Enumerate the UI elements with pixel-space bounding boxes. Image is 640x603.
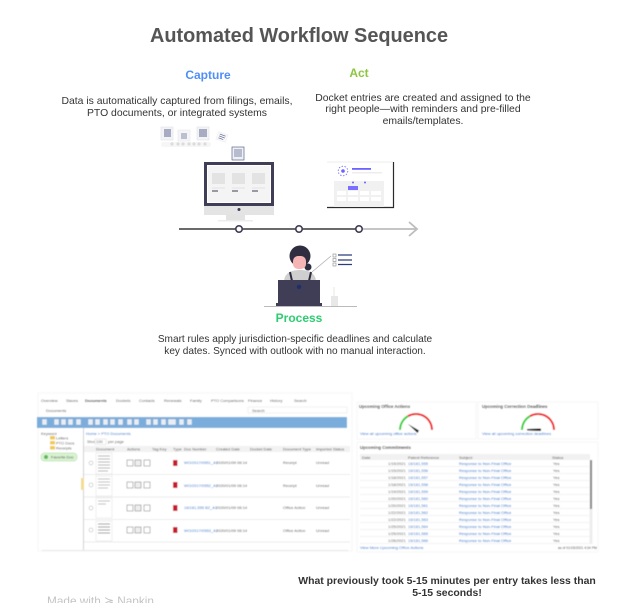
- navigation tabs: PTO Comparisons: [211, 398, 244, 403]
- document table: Home > PTO Documents: [86, 431, 131, 436]
- row 3: Office Action: [283, 505, 305, 510]
- widget: upcoming commitments table: 1/25/2021: [388, 531, 407, 536]
- widget: upcoming commitments table: 1/25/2021: [388, 524, 407, 529]
- widget: upcoming commitments table: Response to Non-Final Office: [459, 468, 512, 473]
- widget: upcoming commitments table: 16/181,557: [408, 475, 429, 480]
- row 1: Unread: [316, 460, 329, 465]
- widget: upcoming commitments table: as of 01/15/2021 4:34 PM: [558, 546, 597, 550]
- widget: upcoming commitments table: Yes: [553, 524, 560, 529]
- icon: floating documents: [161, 127, 244, 160]
- widget: upcoming commitments table: 1/15/2021: [388, 461, 407, 466]
- text block: capture: PTO documents, or integrated systems: [87, 108, 267, 119]
- row 4: 2020/01/09 08:14: [216, 528, 248, 533]
- sidebar tree: Receipts: [56, 446, 72, 450]
- row 4: [89, 521, 329, 541]
- widget: upcoming commitments table: 1/19/2021: [388, 489, 407, 494]
- widget: upcoming commitments table: Yes: [553, 482, 560, 487]
- widget: upcoming commitments table: Yes: [553, 468, 560, 473]
- row 4: WO/2017/0553_A1: [184, 528, 219, 533]
- document table: Actions: [127, 446, 140, 452]
- widget: upcoming commitments table: 16/181,561: [408, 503, 429, 508]
- row 3: Unread: [316, 505, 329, 510]
- widget: upcoming commitments table: 1/15/2021: [388, 468, 407, 473]
- widget: upcoming commitments table: Patent Reference: [408, 455, 440, 460]
- document table: Type: [173, 446, 182, 452]
- widget: upcoming commitments table: 1/20/2021: [388, 503, 407, 508]
- widget: upcoming commitments table: Response to Non-Final Office: [459, 538, 512, 543]
- widget: upcoming commitments table: 16/181,559: [408, 489, 429, 494]
- widget: upcoming commitments table: Yes: [553, 461, 560, 466]
- navigation tabs: History: [270, 398, 282, 403]
- widget: upcoming correction deadlines gauge: View all upcoming correction deadlines: [482, 431, 551, 436]
- sidebar tree: Letters: [56, 436, 68, 440]
- widget: upcoming commitments table: Yes: [553, 510, 560, 515]
- icon: calendar card: [327, 162, 394, 208]
- widget: upcoming office actions gauge: Upcoming Office Actions: [359, 404, 411, 409]
- row 4: Office Action: [283, 528, 305, 533]
- widget: upcoming commitments table: Yes: [553, 475, 560, 480]
- widget: upcoming commitments table: Response to Non-Final Office: [459, 524, 512, 529]
- widget: upcoming commitments table: 1/26/2021: [388, 538, 407, 543]
- widget: upcoming commitments table: 1/20/2021: [388, 496, 407, 501]
- sidebar tree: Keyword: [41, 431, 57, 436]
- row 1: 2020/01/09 08:14: [216, 460, 248, 465]
- widget: upcoming commitments table: 1/22/2021: [388, 517, 407, 522]
- text block: act: Docket entries are created and assigned to the: [315, 93, 531, 104]
- widget: upcoming commitments table: Status: [552, 455, 563, 460]
- widget: upcoming commitments table: 16/181,566: [408, 538, 429, 543]
- title: Automated Workflow Sequence: [150, 25, 448, 47]
- document table: Tag Key: [152, 446, 166, 452]
- text block: capture: [62, 96, 292, 119]
- text block: process: Smart rules apply jurisdiction-specific deadlines and calculate: [158, 334, 433, 345]
- text block: act: [315, 93, 531, 127]
- widget: upcoming correction deadlines gauge: Upcoming Correction Deadlines: [482, 404, 548, 409]
- row 2: WO/2017/0552_A1: [184, 483, 219, 488]
- widget: upcoming commitments table: 1/22/2021: [388, 510, 407, 515]
- widget: upcoming office actions gauge: [357, 402, 476, 439]
- row 2: Unread: [316, 483, 329, 488]
- row 1: [89, 453, 329, 474]
- panel: documents screenshot: [37, 393, 352, 551]
- callout: time savings: What previously took 5-15 minutes per entry takes less than: [298, 576, 596, 587]
- row 2: Receipt: [283, 483, 297, 488]
- widget: upcoming commitments table: [357, 442, 598, 552]
- row 3: [89, 498, 329, 518]
- navigation tabs: Overview: [41, 398, 58, 403]
- widget: upcoming commitments table: 16/181,555: [408, 461, 429, 466]
- illustration: person at laptop: [264, 246, 357, 306]
- navigation tabs: [41, 398, 307, 403]
- widget: upcoming commitments table: Response to Non-Final Office: [459, 475, 512, 480]
- widget: upcoming commitments table: Response to Non-Final Office: [459, 482, 512, 487]
- document table: Document: [96, 446, 115, 452]
- heading: capture: Capture: [185, 68, 231, 82]
- navigation tabs: Slaves: [66, 398, 78, 403]
- widget: upcoming commitments table: Yes: [553, 489, 560, 494]
- heading: act: Act: [349, 66, 369, 80]
- widget: upcoming commitments table: Yes: [553, 517, 560, 522]
- toolbar: [37, 417, 347, 428]
- widget: upcoming commitments table: Subject: [459, 455, 473, 460]
- widget: upcoming commitments table: Response to Non-Final Office: [459, 496, 512, 501]
- widget: upcoming correction deadlines gauge: [478, 402, 598, 439]
- row 1: Receipt: [283, 460, 297, 465]
- widget: upcoming commitments table: 16/181,565: [408, 531, 429, 536]
- widget: upcoming commitments table: 16/181,560: [408, 496, 429, 501]
- navigation tabs: Family: [190, 398, 202, 403]
- widget: upcoming commitments table: Response to Non-Final Office: [459, 510, 512, 515]
- text block: process: [158, 334, 433, 357]
- navigation tabs: Search: [294, 398, 307, 403]
- text block: act: right people—with reminders and pre-filled: [325, 104, 521, 115]
- widget: upcoming commitments table: 16/181,564: [408, 524, 429, 529]
- callout: time savings: [298, 576, 596, 599]
- navigation tabs: Finance: [248, 398, 263, 403]
- widget: upcoming commitments table: 1/18/2021: [388, 482, 407, 487]
- row 1: WO/2017/0551_A1: [184, 460, 219, 465]
- navigation tabs: Documents: [85, 398, 108, 403]
- widget: upcoming commitments table: View More Upcoming Office Actions: [360, 545, 423, 550]
- document table: Show: [87, 439, 97, 444]
- widget: upcoming commitments table: 16/181,563: [408, 517, 429, 522]
- widget: upcoming commitments table: 1/18/2021: [388, 475, 407, 480]
- sidebar tree: Favorite Doc: [51, 454, 74, 460]
- navigation tabs: Dockets: [116, 398, 130, 403]
- document table: 100: [96, 439, 103, 444]
- document table: [81, 431, 350, 542]
- widget: upcoming commitments table: Response to Non-Final Office: [459, 531, 512, 536]
- heading: process: Process: [276, 311, 323, 325]
- widget: upcoming commitments table: Yes: [553, 503, 560, 508]
- widget: upcoming commitments table: Upcoming Commitments: [360, 445, 411, 450]
- panel: documents screenshot: Search: [252, 408, 265, 413]
- row 2: 2020/01/09 08:14: [216, 483, 248, 488]
- widget: upcoming commitments table: 16/181,558: [408, 482, 429, 487]
- document table: per page: [108, 439, 125, 444]
- timeline arrow: [179, 222, 417, 236]
- widget: upcoming commitments table: Date: [362, 455, 371, 460]
- sidebar tree: PTO Docs: [56, 440, 74, 446]
- widget: upcoming commitments table: Yes: [553, 496, 560, 501]
- widget: upcoming commitments table: Yes: [553, 538, 560, 543]
- text block: capture: Data is automatically captured from filings, emails,: [62, 96, 292, 107]
- sidebar tree: [41, 428, 84, 551]
- navigation tabs: Contacts: [139, 398, 155, 403]
- widget: upcoming commitments table: Yes: [553, 531, 560, 536]
- text block: act: emails/templates.: [383, 116, 463, 127]
- panel: documents screenshot: Documents: [46, 408, 66, 413]
- text block: process: key dates. Synced with outlook with no manual interaction.: [164, 346, 426, 357]
- widget: upcoming commitments table: 16/181,556: [408, 468, 429, 473]
- widget: upcoming commitments table: Response to Non-Final Office: [459, 489, 512, 494]
- widget: upcoming commitments table: Response to Non-Final Office: [459, 503, 512, 508]
- widget: upcoming commitments table: Response to Non-Final Office: [459, 517, 512, 522]
- document table: Document Type: [283, 446, 312, 452]
- row 3: 16/181,555 B2_A1: [184, 505, 218, 510]
- row 3: 2020/01/09 08:14: [216, 505, 248, 510]
- panel: dashboard screenshot: [357, 402, 598, 552]
- document table: Doc Number: [184, 446, 207, 452]
- callout: time savings: 5-15 seconds!: [412, 588, 482, 599]
- widget: upcoming office actions gauge: View all upcoming office actions: [360, 431, 417, 436]
- document table: Imported Status: [316, 446, 344, 452]
- widget: upcoming commitments table: Response to Non-Final Office: [459, 461, 512, 466]
- widget: upcoming commitments table: 16/181,562: [408, 510, 429, 515]
- row 4: Unread: [316, 528, 329, 533]
- navigation tabs: Renewals: [164, 398, 182, 403]
- icon: desktop monitor: [204, 162, 274, 222]
- document table: Created Date: [216, 446, 241, 452]
- document table: Docket Date: [250, 446, 273, 452]
- row 2: [81, 476, 329, 496]
